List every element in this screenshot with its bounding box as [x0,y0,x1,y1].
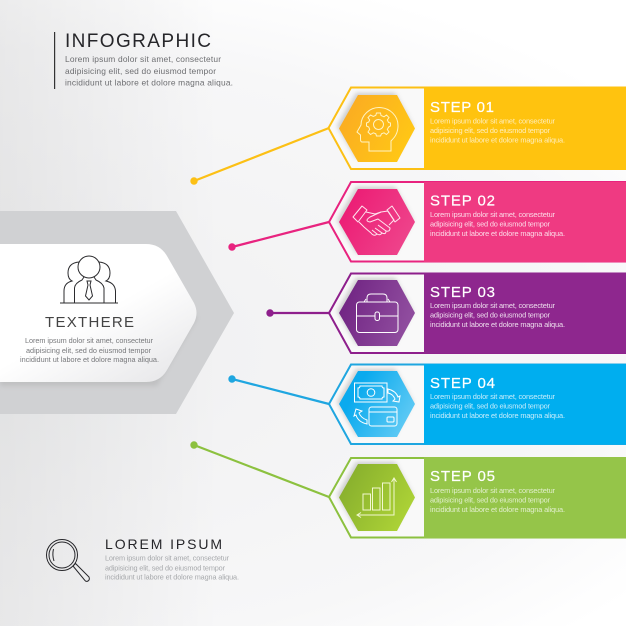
outlined frame [329,458,626,538]
panel: step 4 [329,364,626,444]
panel: step 5 [329,457,626,538]
hexagon [339,464,415,531]
step description: adipisicing elit, sed do eiusmod tempor [430,402,551,410]
footer heading: LOREM IPSUM [105,536,222,552]
panel: step 1 [328,87,626,170]
icon: handshake [353,206,400,235]
step description: adipisicing elit, sed do eiusmod tempor [430,496,551,504]
step description: incididunt ut labore et dolore magna aliqua. [430,229,565,238]
hexagon [339,95,415,162]
icon: money and card exchange [354,383,400,426]
step description [430,486,565,514]
step description [430,116,565,144]
header description [65,54,233,88]
hexagon [339,371,415,437]
step description: Lorem ipsum dolor sit amet, consectetur [430,486,556,495]
step description: incididunt ut labore et dolore magna aliqua. [430,505,565,514]
footer description [105,554,239,582]
grey arrow hexagon [0,211,234,414]
step heading: STEP 02 [430,192,495,210]
step description: incididunt ut labore et dolore magna aliqua. [430,320,565,329]
footer description: incididunt ut labore et dolore magna aliqua. [105,572,239,582]
footer description: Lorem ipsum dolor sit amet, consectetur [105,554,230,562]
header block [54,31,233,89]
step description: Lorem ipsum dolor sit amet, consectetur [430,392,556,401]
colour bar [424,364,626,444]
panel description: adipisicing elit, sed do eiusmod tempor [26,346,152,355]
connector: step 1 [190,128,329,185]
header description: incididunt ut labore et dolore magna aliqua. [65,78,233,88]
heading: text here: TEXTHERE [45,314,134,331]
outlined frame [329,274,626,353]
outlined frame [328,88,626,169]
icon: growth chart [357,478,396,518]
outlined frame [329,364,626,444]
step description [430,392,565,420]
icon: briefcase [356,294,398,332]
panel description [20,336,159,364]
step heading: STEP 04 [430,375,495,392]
colour bar [424,457,626,538]
white rounded hexagon [0,244,196,382]
outlined frame [329,182,626,262]
step heading: STEP 01 [430,99,494,116]
colour bar [424,182,626,262]
connector: step 5 [190,441,329,497]
panel: step 3 [329,273,626,354]
step description: Lorem ipsum dolor sit amet, consectetur [430,210,556,219]
panel: step 2 [329,182,626,262]
step heading: STEP 03 [430,284,495,301]
title: INFOGRAPHIC [65,31,211,52]
header description: Lorem ipsum dolor sit amet, consectetur [65,54,221,64]
footer block [105,536,239,582]
colour bar [424,87,626,170]
icon: head with gear [357,108,398,151]
step description: Lorem ipsum dolor sit amet, consectetur [430,116,556,126]
connector: step 4 [228,375,329,404]
icon: magnifying glass [46,540,89,581]
icon: team [60,256,118,303]
colour bar [424,273,626,354]
step description: Lorem ipsum dolor sit amet, consectetur [430,301,556,310]
step description: adipisicing elit, sed do eiusmod tempor [430,220,551,228]
hexagon [339,189,415,255]
header description: adipisicing elit, sed do eiusmod tempor [65,66,216,76]
step description: incididunt ut labore et dolore magna aliqua. [430,411,565,420]
footer description: adipisicing elit, sed do eiusmod tempor [105,564,226,572]
panel: central team [0,211,234,414]
step heading: STEP 05 [430,468,495,485]
step description: incididunt ut labore et dolore magna aliqua. [430,136,565,144]
panel description: Lorem ipsum dolor sit amet, consectetur [25,336,154,345]
step description: adipisicing elit, sed do eiusmod tempor [430,126,551,135]
panel description: incididunt ut labore et dolore magna aliqua. [20,355,159,364]
connector: step 2 [228,222,329,251]
step description [430,210,565,238]
connector: step 3 [266,309,329,317]
hexagon [339,280,415,346]
step description [430,301,565,329]
step description: adipisicing elit, sed do eiusmod tempor [430,310,551,320]
